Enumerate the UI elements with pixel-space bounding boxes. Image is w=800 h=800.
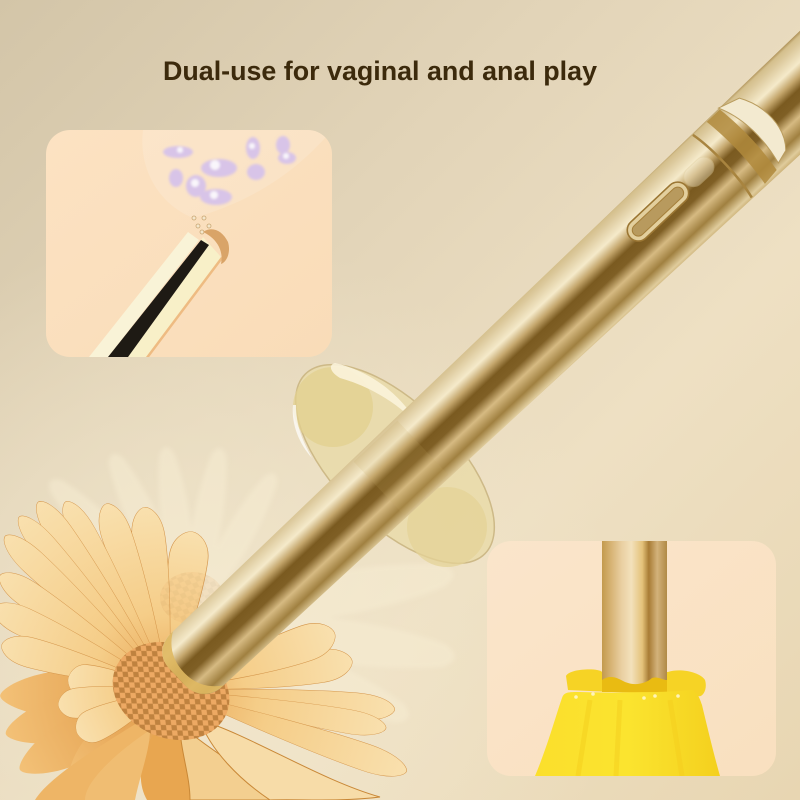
yellow holder front	[535, 690, 720, 776]
long cream petals	[0, 495, 411, 784]
gold liquid	[602, 677, 667, 692]
panel: top left inset	[46, 130, 332, 357]
flower centre	[98, 625, 244, 757]
yellow holder rear	[566, 669, 706, 696]
vertical tube	[602, 541, 667, 687]
ghost flower centre	[160, 572, 224, 624]
sleeve ghost button	[680, 153, 718, 191]
glass tip	[152, 631, 224, 705]
ghost petals	[39, 445, 458, 735]
ring	[693, 132, 755, 198]
mini tube	[89, 229, 229, 357]
disc	[263, 332, 527, 596]
panel: bottom right inset	[487, 541, 776, 776]
pearls	[163, 136, 296, 205]
orange back petals	[0, 668, 187, 800]
flange	[719, 86, 797, 167]
gold band	[707, 107, 780, 184]
disc crossing	[354, 421, 448, 516]
lower petals cut by frame	[35, 715, 380, 800]
droplets	[192, 216, 211, 234]
title: Dual-use for vaginal and anal play	[163, 56, 597, 86]
flower	[0, 445, 458, 800]
product tube	[146, 5, 800, 711]
glass bubble	[142, 130, 332, 218]
button	[623, 178, 693, 246]
